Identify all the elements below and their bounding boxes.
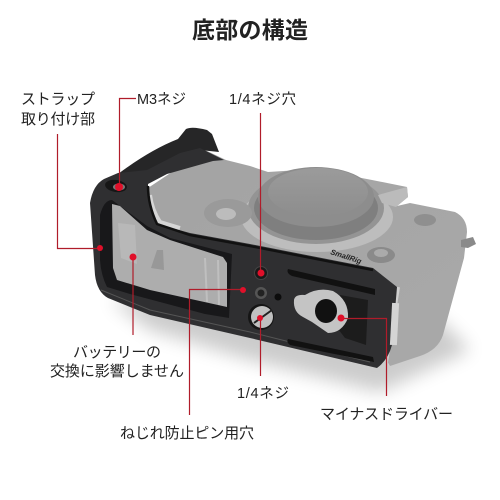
strap lug (461, 237, 476, 248)
1/4 screw (248, 304, 274, 330)
threaded hole (255, 287, 267, 299)
callout: flathead screwdriver: マイナスドライバー (320, 406, 453, 423)
strap slot on side (102, 222, 109, 262)
quick release side (390, 303, 399, 345)
callout: 1/4 screw: 1/4ネジ (237, 385, 289, 402)
screwdriver slot recess (335, 295, 368, 345)
callout: anti-twist pin hole (120, 287, 254, 442)
lens cap (258, 167, 374, 227)
product shadow (110, 300, 470, 392)
callout: 1/4 screw (237, 315, 289, 402)
mounting plate slots (288, 269, 375, 295)
callout: 1/4 screw hole (229, 91, 296, 276)
body edge highlight (386, 287, 398, 362)
door details (118, 223, 137, 264)
camera body (145, 150, 476, 366)
callout: battery: バッテリーの (73, 344, 161, 361)
dials (414, 214, 436, 226)
callout: battery (50, 254, 184, 380)
callout: battery: 交換に影響しません (50, 363, 184, 380)
callout: strap mount: ストラップ (21, 91, 95, 108)
lens mount (241, 182, 393, 252)
callout: strap mount: 取り付け部 (21, 111, 95, 128)
callout: 1/4 screw hole: 1/4ネジ穴 (229, 91, 296, 108)
D-ring plate (294, 290, 348, 333)
callout: M3 screw: M3ネジ (137, 91, 186, 108)
title: 底部の構造 (192, 17, 308, 43)
cage frame (90, 148, 399, 368)
hot shoe (378, 187, 408, 207)
callout: M3 screw (115, 91, 186, 191)
callout: anti-twist pin hole: ねじれ防止ピン用穴 (120, 425, 254, 442)
grip rubber (118, 128, 219, 174)
battery door (112, 204, 227, 307)
callout: strap mount (21, 91, 103, 251)
1/4 screw hole (254, 266, 268, 280)
strap lug hole (104, 179, 128, 193)
brand: SmallRig (329, 247, 363, 266)
battery window shadow (100, 200, 232, 318)
callout: flathead screwdriver (320, 314, 453, 423)
